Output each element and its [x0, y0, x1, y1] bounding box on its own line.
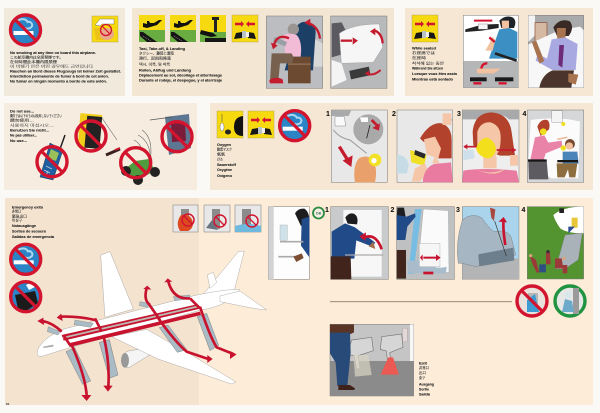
divider line: [330, 301, 512, 303]
left page shading: [5, 198, 199, 405]
illustration: tighten mask straps: [462, 110, 519, 182]
text: do not use notice: [10, 110, 62, 143]
text: emergency exits notice: Notausgänge: [12, 224, 36, 228]
text: do not use notice: Do not use...: [10, 110, 34, 114]
text: oxygen notice: Oxygène: [217, 168, 232, 172]
text: exit notice: Exit: [419, 362, 428, 366]
icon: take-off plane card: [170, 15, 196, 42]
step number 3: 3: [457, 111, 461, 118]
text: exit notice: [419, 362, 435, 396]
text: oxygen notice: 酸素マスク: [217, 146, 232, 152]
illustration: floor exit lighting: [330, 324, 414, 396]
panel: no smoking: [4, 8, 125, 96]
step number 4: 4: [522, 111, 526, 118]
icon: no smoking in lavatory card: [92, 16, 118, 42]
text: taxi notice: Déplacement au sol, décollage et atterrissage: [139, 74, 222, 78]
panel: while seated: [405, 8, 593, 96]
icon: do not take carry-on on slide: [517, 286, 547, 316]
panel: taxi, take-off and landing: [132, 8, 394, 96]
icon: no personal stereo: [76, 113, 120, 155]
panel: emergency exits: [5, 198, 593, 406]
text: exit notice: Sortie: [419, 388, 429, 392]
text: taxi notice: [139, 47, 222, 82]
text: oxygen notice: Sauerstoff: [217, 163, 237, 167]
text: oxygen notice: 산소: [217, 156, 224, 162]
icon: no smoking sign: [11, 244, 41, 274]
text: exit notice: 출구: [419, 375, 426, 380]
icon: no mobile phone: [37, 135, 67, 180]
illustration: door before opening: [268, 207, 309, 279]
icon: no smoking sign: [280, 111, 310, 141]
text: while seated notice: 在座時: [412, 55, 427, 60]
icon: OK green circle: OK: [316, 211, 322, 215]
step number 2: 2: [390, 207, 394, 214]
text: no smoking notice: 이 비행기 안은 어떤 경우에도 금연입니다: [10, 64, 94, 68]
text: exit notice: 出口: [419, 370, 426, 375]
text: do not use notice: No use...: [10, 139, 27, 143]
text: emergency exits notice: Emergency exits: [12, 206, 43, 210]
illustration: man with safety card: [528, 15, 584, 88]
text: no smoking notice: No fumar en ningún momento a bordo de este avión.: [10, 80, 107, 84]
text: while seated notice: Lorsque vous êtes assis: [412, 72, 457, 76]
icon: no baggage sign: [11, 282, 41, 312]
icon: correct slide position: [555, 286, 585, 316]
text: emergency exits notice: 緊急出口: [12, 214, 27, 218]
text: while seated notice: 착석해 있는 동안: [412, 60, 445, 66]
text: emergency exits notice: [12, 206, 55, 239]
text: while seated notice: While seated: [412, 46, 437, 50]
text: oxygen notice: [217, 143, 237, 178]
icon: taxi plane card: [139, 15, 165, 42]
panel: do not use devices: [4, 103, 197, 190]
text: do not use notice: Benutzen Sie nicht...: [10, 128, 49, 132]
illustration: rotate door handle: [331, 207, 388, 279]
illustration: help child with mask: [527, 110, 584, 182]
text: oxygen notice: Oxygen: [217, 143, 232, 147]
text: emergency exits notice: 비상구: [12, 218, 23, 222]
text: taxi notice: Taxi, Take-off, & Landing: [139, 47, 186, 51]
text: emergency exits notice: Salidas de emergencia: [12, 235, 55, 239]
text: oxygen notice: 氧氣: [217, 152, 225, 156]
step number 1: 1: [326, 111, 330, 118]
text: taxi notice: 택시, 이륙, 및 착륙: [139, 62, 171, 66]
illustration: fastening belt: [463, 15, 518, 88]
icon: no exit if debris: [204, 205, 230, 232]
text: while seated notice: Mientras está sentado: [412, 78, 454, 82]
text: taxi notice: Rollen, Abflug und Landung: [139, 68, 192, 72]
text: emergency exits notice: 非常口: [12, 208, 21, 214]
text: exit notice: Ausgang: [419, 382, 435, 386]
text: while seated notice: お座席では: [412, 50, 436, 55]
text: no smoking notice: 在何時間此本機內限禁煙: [10, 59, 57, 64]
illustration: airplane with exit routes: [37, 251, 267, 401]
text: no smoking notice: Interdiction permanente de fumer à bord de cet avion.: [10, 74, 109, 78]
icon: seat belt card: [412, 15, 438, 42]
text: do not use notice: 請勿使用…: [10, 118, 35, 122]
illustration: push door open: [397, 207, 454, 279]
text: taxi notice: Durante el rodaje, el despegue, y el aterrizaje: [139, 78, 222, 82]
icon: no smoking sign: [10, 15, 40, 45]
text: do not use notice: Ne pas utiliser...: [10, 134, 37, 138]
text: no smoking notice: No smoking at any time on board this airplane.: [10, 51, 96, 55]
step number 2: 2: [392, 111, 396, 118]
icon: seat belt card: [232, 15, 258, 42]
icon: oxygen card: [217, 111, 243, 138]
text: no smoking notice: Rauchen an Bord dieses Flugzeugs ist keiner Zeit gestattet.: [10, 70, 121, 74]
illustration: seated passenger upright: [266, 16, 323, 88]
icon: no hand-held game: [150, 114, 192, 155]
text: no smoking notice: [10, 51, 121, 84]
illustration: slide inflation: [457, 207, 519, 279]
text: taxi notice: タクシー、離陸と着陸: [139, 50, 174, 56]
text: taxi notice: 滑行、起飛和降落: [139, 56, 171, 60]
step number 4: 4: [522, 207, 526, 214]
icon: landing with tower card: [200, 15, 226, 42]
icon: no exit if water: [235, 205, 261, 232]
text: exit notice: Salida: [419, 392, 431, 396]
illustration: pull oxygen mask: [331, 110, 387, 182]
icon: no exit if fire: [173, 205, 198, 232]
illustration: seat back and bag stowed: [331, 16, 387, 88]
panel: oxygen: [210, 103, 593, 190]
illustration: evacuating down slide: [527, 207, 584, 279]
text: exit notice: 非常口: [419, 365, 429, 370]
step number 3: 3: [456, 207, 460, 214]
text: while seated notice: [412, 46, 457, 82]
icon: no remote control car: [121, 130, 160, 185]
text: oxygen notice: Oxígeno: [217, 174, 233, 178]
text: no smoking notice: この航空機内は全席禁煙です。: [10, 54, 63, 60]
page number: 64: [6, 402, 10, 406]
text: do not use notice: 사용하지 마십시오…: [10, 122, 55, 128]
icon: seat belt card: [248, 111, 274, 138]
illustration: place mask over mouth: [397, 110, 453, 182]
step number 1: 1: [325, 207, 329, 214]
text: while seated notice: Während Sie sitzen: [412, 66, 444, 70]
icon: OK green circle: [313, 208, 324, 218]
text: emergency exits notice: Sorties de secours: [12, 230, 46, 234]
text: do not use notice: 機内では以下のものは使用しないでください: [10, 113, 62, 118]
